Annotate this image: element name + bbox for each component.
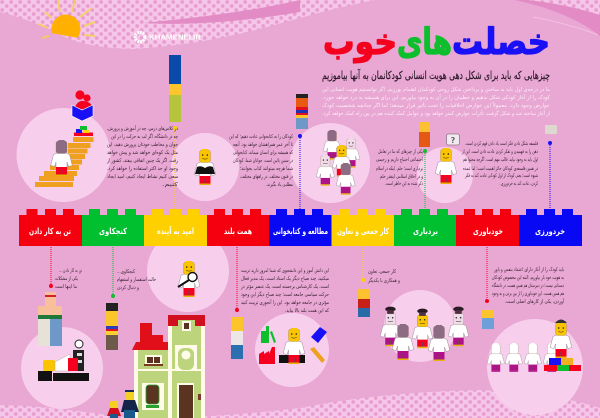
text: khodbavari: به هویت خود بار بیاوریم. البته این مخصوص کودکان: [492, 275, 564, 281]
text: hemmat boland: این دانش آموز و این دانشجوی که شما امروز دارید تربیت: [241, 267, 329, 274]
brick band: [19, 209, 582, 246]
text: omid be ayande: رفت. اگر یک چنین اتفاقی بیفتد، کشور از: [106, 157, 178, 164]
text: bordbari: ذکر شده به این خاطر است.: [385, 181, 423, 187]
text: khodbavari: باید کودک را از آغاز دارای اعتماد بنفس و باور: [493, 266, 564, 273]
text: omid be ayande: وجود او حد اکثر استفاده را خواهد کرد.: [107, 166, 178, 172]
title: خوب: [323, 22, 397, 63]
brick: tan be kar dadan: [19, 209, 82, 246]
bottom decorative band: [0, 390, 600, 418]
intro paragraph: ما در درجه‌ی اول باید به ساختن و پرداختن شکل روحی کودکمان اهتمام بورزیم. اگر توانستیم هویت انسانی این: [322, 86, 550, 93]
text: omid be ayande: مثل یک کوه‌ای خواهد شد و پیش خواهد: [107, 149, 178, 156]
figure: back view on stairs: [51, 140, 72, 176]
intro paragraph: از آغاز ساخته شد و شکل گرفت، تأثرات عوارض کمتر خواهد بود و عوامل کمک کننده هم در بین راه کمک خواهد کرد.: [322, 109, 550, 117]
stairs with bricks: [35, 126, 94, 187]
icon: sun: [38, 0, 95, 44]
text: kheradvarzi: در همین فلسفه‌ی کودکان حائز اهمیت است؛ اما عمده: [463, 166, 538, 172]
text: tan be kar dadan: تن به کار دادن ...: [59, 268, 82, 274]
figure with industry icons: [259, 326, 327, 364]
text: omid be ayande: در کلاس‌های درس، چه در آموزش و پرورش،: [107, 125, 179, 132]
text: hemmat boland: که این همت بلند بالا بیاید.: [285, 308, 329, 314]
text: konjkavi: کنجکاوی...: [117, 269, 135, 275]
text: hemmat boland: است، یک کارشناس برجسته است، یک عنصر مؤثر در: [240, 283, 329, 290]
text: kar jamei: و همکاری با یکدیگر: [367, 277, 400, 284]
stack 9: [482, 310, 494, 329]
stack 8: [358, 289, 370, 317]
figure with magnifier: [178, 261, 200, 297]
text: omid be ayande: جوان و مخاطب خودتان پرورش دهید، این: [107, 142, 178, 148]
figure: reader: [194, 149, 216, 185]
text: motalee: مطلبی یاد بگیرند.: [266, 181, 293, 188]
figure lying on bed with clock: [38, 340, 89, 381]
circle panels: [16, 108, 583, 415]
text: konjkavi: و دنبال کردن: [117, 285, 139, 291]
text: omid be ayande: کنیم.: [162, 182, 179, 188]
figures: confident figure on bricks: [487, 320, 581, 372]
brick: kar jamei: [332, 209, 394, 246]
figures: team with chef hats: [380, 307, 469, 361]
text: konjkavi: [117, 269, 156, 291]
text: kar jamei: کار جمعی، تعاون: [368, 269, 396, 275]
text: bordbari: یکی از چیزهای که ما در تعامل: [378, 149, 423, 155]
text: tan be kar dadan: یکی از مشکلات: [55, 276, 78, 282]
intro paragraph: کودک را از آغاز کودکی شکل بدهیم و خطیبان را در آن به وجود بیاوریم، این برای همیشه به درد خواهد خورد.: [322, 94, 551, 101]
logo: KHAMENEI.IR: [149, 32, 202, 42]
text: motalee: شما هرچه میتوانند کتاب بخوانند؛: [240, 166, 293, 172]
connector lines: [51, 128, 550, 310]
text: bordbari: بردباری است؛ حلم. اینکه در اسلام: [376, 166, 423, 172]
brick: kheradvarzi: خردورزی: [535, 227, 565, 237]
text: kheradvarzi: اول باید به وجود بیاید. قالب مهم است. اگرچه محتوا هم: [463, 156, 538, 163]
title: [323, 22, 550, 63]
brick: tan be kar dadan: تن به کار دادن: [29, 227, 71, 237]
stack 6: [106, 303, 118, 350]
text: khodbavari: [492, 266, 564, 305]
brick: omid be ayande: [144, 209, 207, 246]
text: tan be kar dadan: ما اینها است: [55, 284, 77, 290]
figures: group for patience: [316, 130, 360, 195]
text: khodbavari: آوردن، یکی از کارهای اصلی است.: [505, 298, 564, 305]
text: bordbari: [376, 149, 423, 187]
text: hemmat boland: مؤثری در جامعه خواهد بود. این را آنجوری تربیت کنید: [241, 299, 329, 306]
figure with question bubble: ?: [451, 136, 456, 145]
stack 1: [169, 55, 181, 122]
intro paragraph: [322, 86, 551, 117]
brick: kar jamei: کار جمعی و تعاون: [337, 227, 389, 237]
stack 3: [419, 122, 430, 147]
text: omid be ayande: سعی کنیم نشاط ایجاد کنیم، امید ایجاد: [107, 174, 178, 180]
text: kheradvarzi: کردن، عادت کند به خردورزی.: [500, 181, 538, 187]
text: kar jamei: [367, 269, 400, 284]
text: motalee: [229, 134, 293, 188]
text: kheradvarzi: ذهن را به فهمیدن و تفکر کردن عادت دادن است. این از: [461, 149, 538, 155]
text: motalee: تا آخر عمر همراهشان خواهد بود. آنچه: [233, 141, 293, 148]
text: motalee: در فنون مختلف، در راههای مختلف،: [240, 174, 293, 180]
brick: hemmat boland: [207, 209, 269, 246]
figures: child and graduate: [107, 390, 139, 418]
text: tan be kar dadan: [55, 268, 82, 290]
text: motalee: کودکان را به کتابخوانی عادت دهیم؛ که این: [229, 134, 293, 140]
stack 4: [545, 125, 557, 134]
text: bordbari: اجتماعی احتیاج داریم و رحیمی: [376, 157, 423, 163]
figure with question bubble: [435, 134, 460, 184]
text: motalee: در سنین پائین است. جوانان شما، کودکان: [233, 158, 293, 164]
brick: khodbavari: [456, 209, 519, 246]
text: kheradvarzi: فلسفه شکل دادن فکر است یاد دادن فهم کردن است.: [465, 141, 538, 147]
title: های: [397, 22, 452, 63]
brick: omid be ayande: امید به آینده: [157, 225, 194, 237]
text: bordbari: و در اخلاق اسلامی اینقدر حلم: [380, 174, 423, 180]
brick: konjkavi: [82, 209, 144, 246]
text: hemmat boland: [240, 267, 329, 314]
connector dots: [49, 126, 552, 312]
icon: reading red figures and blue book: [72, 90, 93, 121]
text: motalee: که همیشه برای انسان میماند، کتابخوانی: [233, 150, 293, 156]
text: hemmat boland: حرکت سیاسی جامعه است؛ چند صباح دیگر این وجود: [241, 291, 329, 298]
text: konjkavi: حالت استفسار و استفهام: [117, 277, 156, 283]
brick: bordbari: بردباری: [413, 227, 438, 237]
text: kheradvarzi: [461, 141, 538, 187]
title: خصلت: [452, 22, 550, 63]
brick: hemmat boland: همت بلند: [224, 227, 252, 237]
brick: khodbavari: خودباوری: [473, 227, 503, 237]
text: omid be ayande: چه در دانشگاه، اگر لب به حرکت را در این: [111, 133, 178, 140]
stack 5: [38, 292, 62, 346]
text: hemmat boland: میکنید، چند صباح دیگر یک استاد است، یک مدیر فعال: [241, 275, 329, 282]
intro paragraph: عوارض وجود دارد. معمولاً این عوارض اخلاقیات را تحت تأثیر قرار میدهد؛ اما اگر چنانچه شخصیت کودک: [322, 101, 550, 109]
brick: bordbari: [394, 209, 456, 246]
brick: kheradvarzi: [519, 209, 582, 246]
stack 7: [231, 317, 243, 359]
brick: konjkavi: کنجکاوی: [99, 227, 127, 237]
text: omid be ayande: [106, 125, 179, 188]
stack 2: [296, 94, 308, 129]
house: [132, 315, 205, 418]
text: kheradvarzi: شیوه است؛ یعنی کودک از اول کودکی عادت کند به فکر: [464, 172, 538, 179]
brick: motalee: مطالعه و کتابخوانی: [273, 227, 328, 237]
brick: motalee: [269, 209, 332, 246]
top decorative band: [0, 0, 600, 49]
